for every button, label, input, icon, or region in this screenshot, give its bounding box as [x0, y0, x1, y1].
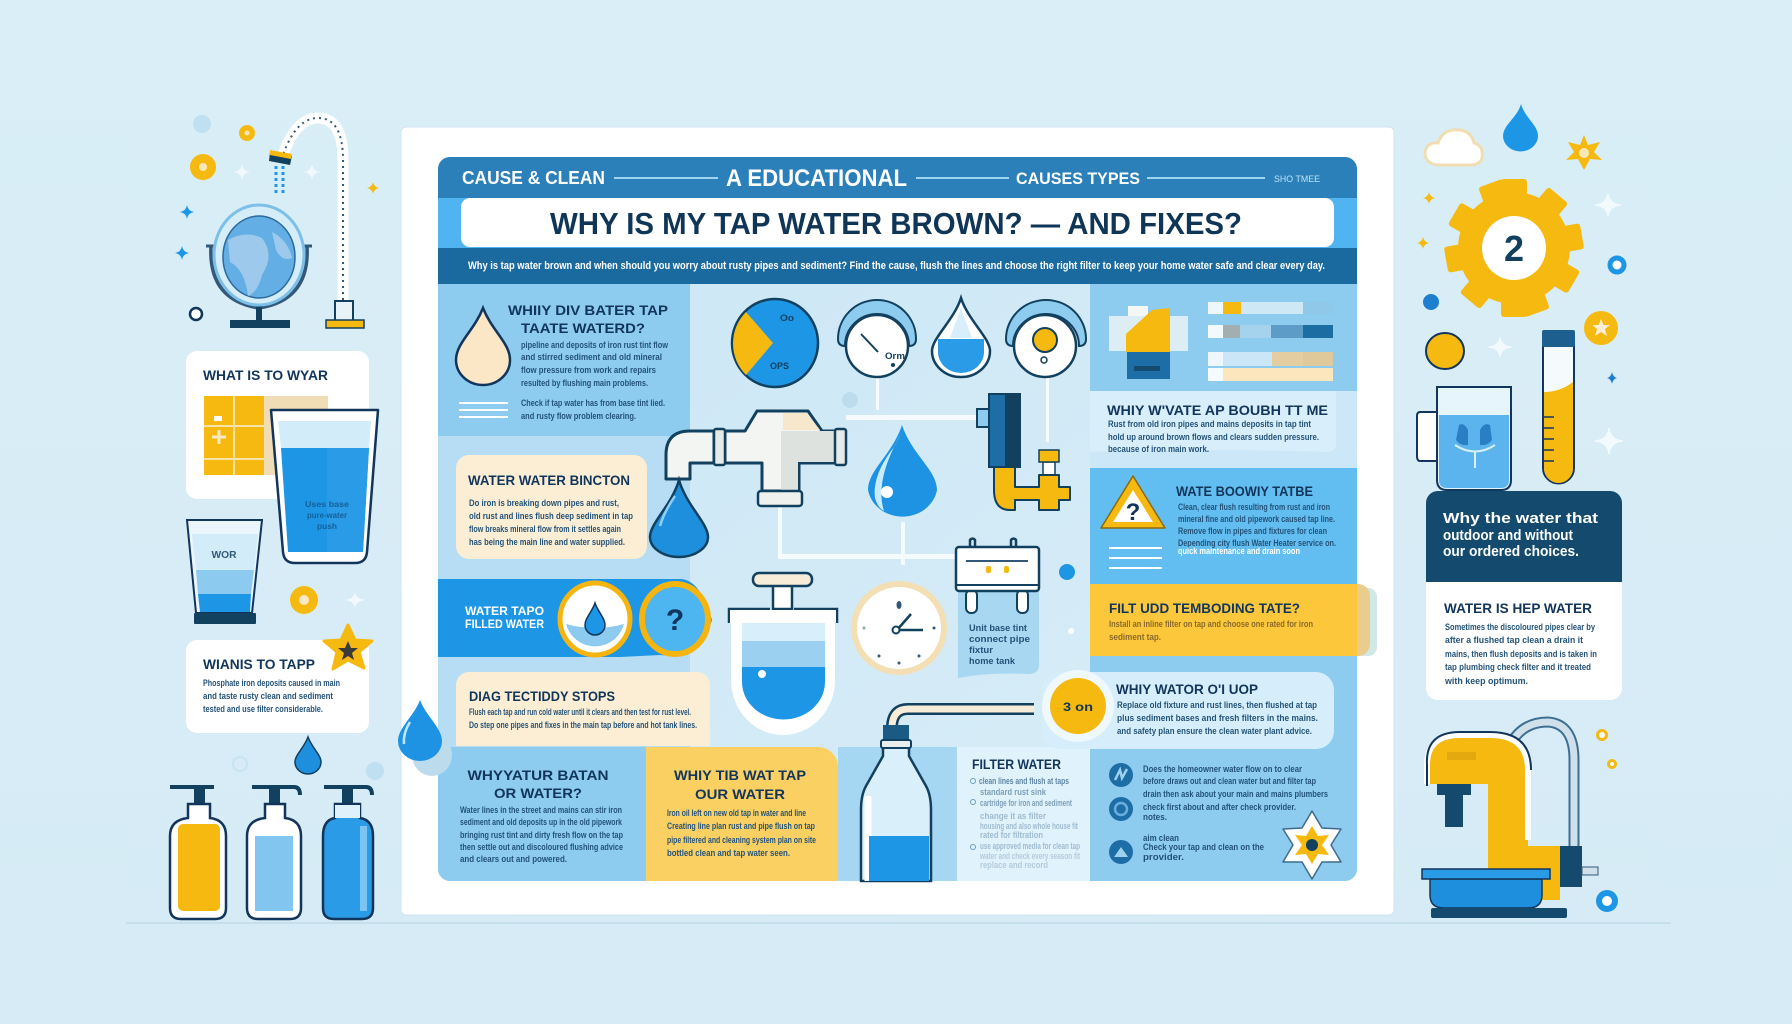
panel: water help card: mains, then flush deposits and is taken in: [1445, 649, 1597, 659]
panel: water direction callout: [456, 455, 647, 559]
panel: lower right: Check your tap and clean on the: [1143, 842, 1264, 852]
icon: cream drop: [456, 308, 510, 385]
callout: why water card: WHIY WATOR O'I UOP: [1116, 681, 1258, 697]
icon: large glass: push: [317, 522, 337, 531]
panel: why water: OR WATER?: [494, 785, 582, 801]
panel: dark note card: [1426, 491, 1622, 582]
callout: why water card: and safety plan ensure the clean water plant advice.: [1117, 726, 1312, 736]
panel: what is to wear card: [186, 351, 369, 499]
icon: yellow coin: [290, 586, 318, 614]
panel: water help card: with keep optimum.: [1444, 676, 1528, 686]
panel: filter water list: FILTER WATER: [972, 756, 1061, 772]
panel: why water: bringing rust tint and dirty fresh flow on the tap: [460, 830, 623, 840]
panel: why the tap yellow: Iron oil left on new old tap in water and line: [667, 808, 806, 818]
icon: gear with number: [1444, 179, 1584, 317]
icon: bottle with pipe: [861, 709, 1034, 881]
gauge icon right: [1006, 300, 1086, 377]
panel: lower right: notes.: [1143, 812, 1167, 822]
right side decorations: [1417, 104, 1624, 454]
panel: water direction callout: WATER WATER BINCTON: [468, 472, 630, 488]
panel: why tap tastes: and stirred sediment and old mineral: [521, 352, 662, 362]
panel: water tap filled band: FILLED WATER: [465, 617, 544, 631]
panel: filter water list: cartridge for iron and sediment: [980, 798, 1072, 808]
panel: yellow filter tab: Install an inline filter on tap and choose one rated for iron: [1109, 619, 1313, 629]
panel: why water: and clears out and powered.: [460, 854, 567, 864]
panel: wants to tap card: WIANIS TO TAPP: [203, 656, 315, 672]
panel: warning: Remove flow in pipes and fixtures for clean: [1178, 526, 1327, 536]
panel: why the tap yellow: pipe filtered and cleaning system plan on site: [667, 835, 816, 845]
panel: warning: Clean, clear flush resulting from rust and iron: [1178, 502, 1330, 512]
subtitle band: [438, 248, 1357, 284]
icon: gooseneck faucet: [269, 118, 364, 328]
callout: why water card: [1042, 670, 1334, 749]
panel: why water right text: [1090, 391, 1357, 468]
faucet icon: [666, 411, 846, 506]
panel: water direction callout: Do iron is breaking down pipes and rust,: [469, 498, 619, 508]
panel: warning: quick maintenance and drain soon: [1178, 546, 1300, 556]
panel: why water: [438, 747, 646, 881]
panel: filter water list: [957, 747, 1090, 881]
panel: warning: mineral fine and old pipework caused tap line.: [1178, 514, 1335, 524]
panel: filter water list: housing and also whole house fit: [980, 821, 1078, 831]
icon: blue bottle: [323, 787, 373, 919]
icon: device box: connect pipe: [969, 634, 1030, 644]
panel: why the tap yellow: [646, 747, 838, 881]
panel: why water: sediment and old deposits up in the old pipework: [460, 817, 623, 827]
icon: warning triangle: [1101, 476, 1165, 528]
icon: yellow bottle: [170, 787, 226, 919]
panel: why tap tastes: TAATE WATERD?: [521, 320, 645, 336]
faint bubbles: [842, 392, 858, 408]
header bar: CAUSE & CLEAN: [462, 168, 605, 188]
panel: why tap tastes: WHIIY DIV BATER TAP: [508, 302, 668, 318]
panel: why tap tastes: resulted by flushing main problems.: [521, 378, 648, 388]
bottom row background: [838, 747, 957, 881]
icon: valve pipe: [977, 394, 1070, 510]
panel: water help card: WATER IS HEP WATER: [1444, 600, 1592, 616]
callout: why water card: plus sediment bases and fresh filters in the mains.: [1117, 713, 1318, 723]
lower left background: [438, 436, 690, 747]
icon: device box: [956, 539, 1039, 678]
panel: water help card: [1426, 582, 1622, 700]
small ring dots: [1598, 730, 1616, 909]
panel: why the tap yellow: bottled clean and tap water seen.: [667, 848, 790, 858]
icon: gear with number: 2: [1504, 228, 1524, 269]
icon: clock: [854, 584, 944, 672]
panel: wants to tap card: tested and use filter considerable.: [203, 704, 323, 714]
panel: dark note card: outdoor and without: [1443, 527, 1573, 544]
left side decorations: [175, 115, 379, 320]
header bar: SHO TMEE: [1274, 174, 1320, 184]
panel: water direction callout: old rust and lines flush deep sediment in tap: [469, 511, 633, 521]
icon: small drop: [295, 737, 321, 774]
panel: dark note card: Why the water that: [1443, 510, 1598, 527]
panel: diag steps callout: DIAG TECTIDDY STOPS: [469, 688, 615, 704]
icon: large glass: [271, 410, 378, 563]
panel: filter water list: water and check every season fit: [979, 851, 1080, 861]
pie chart icon: [732, 299, 818, 387]
panel: water help card: Sometimes the discoloured pipes clear by: [1445, 622, 1595, 632]
panel: lower right: before draws out and clean water but and filter tap: [1143, 776, 1316, 786]
panel: lower right: check first about and after check provider.: [1143, 802, 1296, 812]
subtitle band: Why is tap water brown and when should you worry about rusty pipes and sediment? Find the cause, flush the lines and choose the right filter to keep your home water safe and clear every day.: [468, 260, 1325, 272]
panel: warning: Depending city flush Water Heater service on.: [1178, 538, 1336, 548]
panel: why tap tastes: [438, 284, 690, 436]
panel: why the tap yellow: WHIY TIB WAT TAP: [674, 767, 806, 783]
icon: small glass: [187, 520, 262, 624]
panel: wants to tap card: [186, 640, 369, 733]
panel: water help card: tap plumbing check filter and it treated: [1445, 662, 1591, 672]
icon: large glass: Uses base: [305, 500, 350, 509]
icon: filter flask: [729, 573, 837, 735]
panel: why tap tastes: flow pressure from work and repairs: [521, 365, 656, 375]
panel: yellow filter tab: sediment tap.: [1109, 632, 1161, 642]
panel: why water right text: hold up around brown flows and clears sudden pressure.: [1108, 432, 1319, 442]
icon: falling drop: [650, 480, 708, 557]
panel: dark note card: our ordered choices.: [1443, 543, 1579, 560]
icon: device box: Unit base tint: [969, 623, 1027, 633]
panel: filter water list: use approved media for clean tap: [980, 841, 1080, 851]
panel: why tap tastes: and rusty flow problem clearing.: [521, 411, 636, 421]
panel: lower right: Does the homeowner water flow on to clear: [1143, 764, 1302, 774]
icon: round tool 1: [1109, 763, 1133, 787]
icon: small glass: WOR: [212, 550, 237, 561]
panel: water tap filled band: [438, 579, 712, 657]
connector lines: [778, 377, 1049, 565]
paper panel: [401, 127, 1394, 915]
icon: test tube: [1542, 330, 1575, 484]
icon: question ring: ?: [666, 604, 684, 637]
icon: yellow tap station: [1422, 722, 1598, 918]
gauge icon left: Orm: [885, 351, 905, 361]
panel: why water: Water lines in the street and mains can stir iron: [460, 805, 622, 815]
panel: lower right: drain then ask about your main and mains plumbers: [1143, 789, 1328, 799]
title band: [438, 198, 1357, 248]
panel: why the tap yellow: Creating line plan rust and pipe flush on tap: [667, 821, 815, 831]
panel: why water: then settle out and discoloured flushing advice: [460, 842, 623, 852]
panel: why water right text: WHIY W'VATE AP BOUBH TT ME: [1107, 402, 1328, 418]
icon: mug: [1417, 387, 1511, 490]
icon: folder box: [1109, 306, 1188, 379]
pie chart icon: Oo: [780, 313, 795, 323]
panel: what is to wear card: WHAT IS TO WYAR: [203, 367, 328, 383]
panel: yellow filter tab: FILT UDD TEMBODING TATE?: [1109, 600, 1300, 616]
panel: why tap tastes: pipeline and deposits of iron rust tint flow: [521, 340, 669, 350]
title band: WHY IS MY TAP WATER BROWN? — AND FIXES?: [550, 206, 1242, 241]
icon: warning triangle: ?: [1126, 499, 1140, 526]
drop gauge icon: [932, 298, 990, 377]
icon: round tool 3: [1109, 840, 1133, 864]
panel: lower right: aim clean: [1143, 833, 1179, 843]
panel: filter water list: change it as filter: [980, 811, 1046, 821]
icon: round tool 2: [1109, 797, 1133, 821]
header bar: [438, 157, 1357, 198]
panel: wants to tap card: and taste rusty clean and sediment: [203, 691, 333, 701]
panel: yellow filter tab: [1090, 584, 1377, 656]
panel: why water right text: because of iron main work.: [1108, 444, 1209, 454]
icon: large glass: pure-water: [307, 511, 347, 520]
panel: diag steps callout: Do step one pipes and fixes in the main tap before and hot tank lines.: [469, 720, 697, 730]
panel: why the tap yellow: OUR WATER: [695, 786, 785, 802]
panel: lower right: provider.: [1143, 852, 1184, 862]
panel: filter water list: replace and record: [980, 860, 1048, 870]
panel: diag steps callout: [456, 672, 710, 746]
panel: filter water list: clean lines and flush at taps: [979, 776, 1069, 786]
icon: globe: [206, 205, 312, 328]
icon: pale blue bottle: [247, 787, 301, 919]
panel: warning: WATE BOOWIY TATBE: [1176, 483, 1313, 499]
panel: lower right: [1042, 656, 1357, 881]
icon: question ring: [642, 584, 708, 654]
panel: diag steps callout: Flush each tap and run cold water until it clears and then test for rust level.: [469, 707, 691, 717]
header bar: CAUSES TYPES: [1016, 169, 1140, 188]
panel: water help card: after a flushed tap clean a drain it: [1445, 635, 1583, 645]
header bar: A EDUCATIONAL: [726, 165, 907, 192]
right column: chart blocks: [1090, 284, 1357, 391]
icon: device box: fixtur: [969, 645, 994, 655]
callout: why water card: Replace old fixture and rust lines, then flushed at tap: [1117, 700, 1317, 710]
icon: drop on paper edge: [398, 700, 452, 776]
panel: filter water list: standard rust sink: [980, 787, 1047, 797]
icon: star: [324, 625, 372, 669]
icon: water level ring: [560, 583, 630, 655]
pie chart icon: OPS: [770, 361, 789, 371]
icon: star badge: [1283, 811, 1341, 879]
panel: wants to tap card: Phosphate iron deposits caused in main: [203, 678, 340, 688]
panel: why water right text: Rust from old iron pipes and mains deposits in tap tint: [1108, 419, 1311, 429]
panel: why tap tastes: Check if tap water has from base tint lied.: [521, 398, 665, 408]
panel: water direction callout: has being the main line and water supplied.: [469, 537, 625, 547]
callout: why water card: 3 on: [1063, 700, 1093, 714]
panel: why water: WHYYATUR BATAN: [468, 767, 608, 783]
panel: warning: [1090, 468, 1357, 584]
panel: water direction callout: flow breaks mineral flow from it settles again: [469, 524, 621, 534]
icon: big water drop: [868, 425, 937, 517]
main infographic panel: [438, 157, 1377, 881]
bar chart: [1208, 302, 1333, 381]
panel: filter water list: rated for filtration: [980, 830, 1043, 840]
gauge icon left: [838, 300, 916, 377]
panel: water tap filled band: WATER TAPO: [465, 604, 544, 618]
icon: device box: home tank: [969, 656, 1016, 666]
